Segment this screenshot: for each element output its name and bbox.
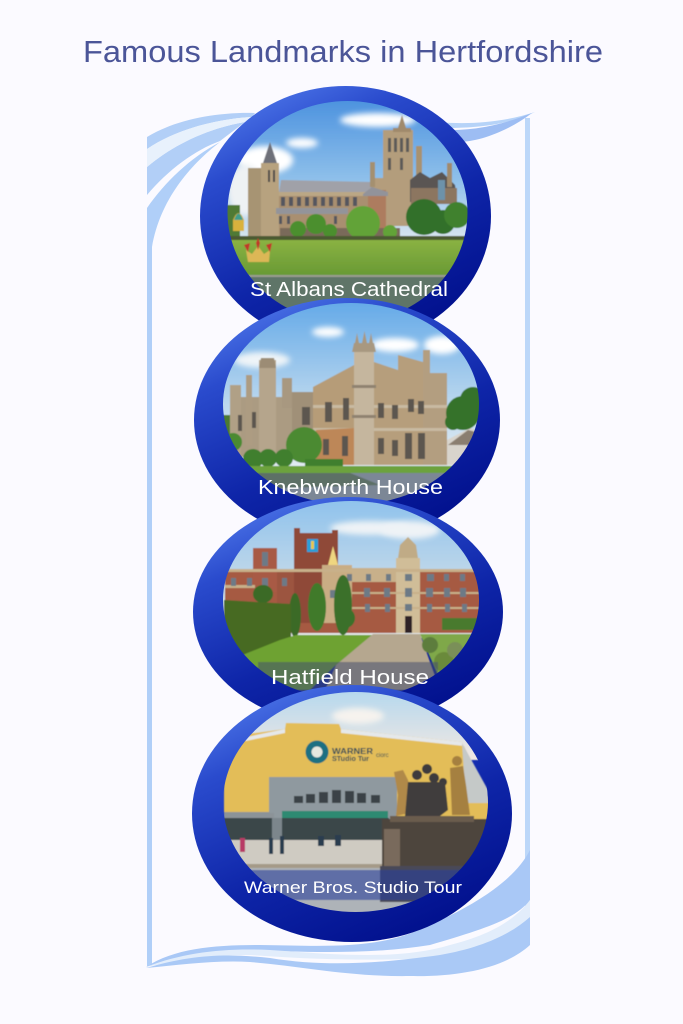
- ring: [194, 298, 500, 542]
- decorative ribbon frame: [146, 112, 535, 976]
- landmark 2: Knebworth House: [194, 298, 500, 542]
- label: Knebworth House: Knebworth House: [258, 476, 443, 499]
- title: Famous Landmarks in Hertfordshire: [83, 34, 603, 69]
- ribbon: top right: [438, 112, 535, 142]
- sculpture: [394, 756, 470, 816]
- sign: studio logo: ciorc: [376, 753, 389, 759]
- ribbon: bottom: [146, 850, 530, 976]
- label: St Albans Cathedral: St Albans Cathedral: [250, 279, 448, 301]
- landmark 4: Warner Bros. Studio Tour: [192, 685, 512, 942]
- photo: studio building: [222, 690, 494, 916]
- ribbon: top left: [147, 113, 255, 262]
- sign: studio logo: WARNER: [332, 746, 373, 756]
- sign: studio logo: STudio Tur: [332, 754, 369, 763]
- photo: brick house: [222, 498, 482, 702]
- ring: [193, 497, 503, 727]
- ring: [192, 685, 512, 942]
- landmark 3: Hatfield House: [193, 497, 503, 727]
- photo: manor house: [222, 300, 486, 513]
- ring: [200, 86, 491, 346]
- label: Warner Bros. Studio Tour: Warner Bros. Studio Tour: [244, 878, 462, 897]
- icon: crown: [244, 238, 272, 262]
- sign: studio logo: [306, 740, 389, 764]
- label: Hatfield House: Hatfield House: [271, 666, 429, 689]
- landmark 1: St Albans Cathedral: [200, 86, 491, 346]
- photo: cathedral: [228, 101, 468, 308]
